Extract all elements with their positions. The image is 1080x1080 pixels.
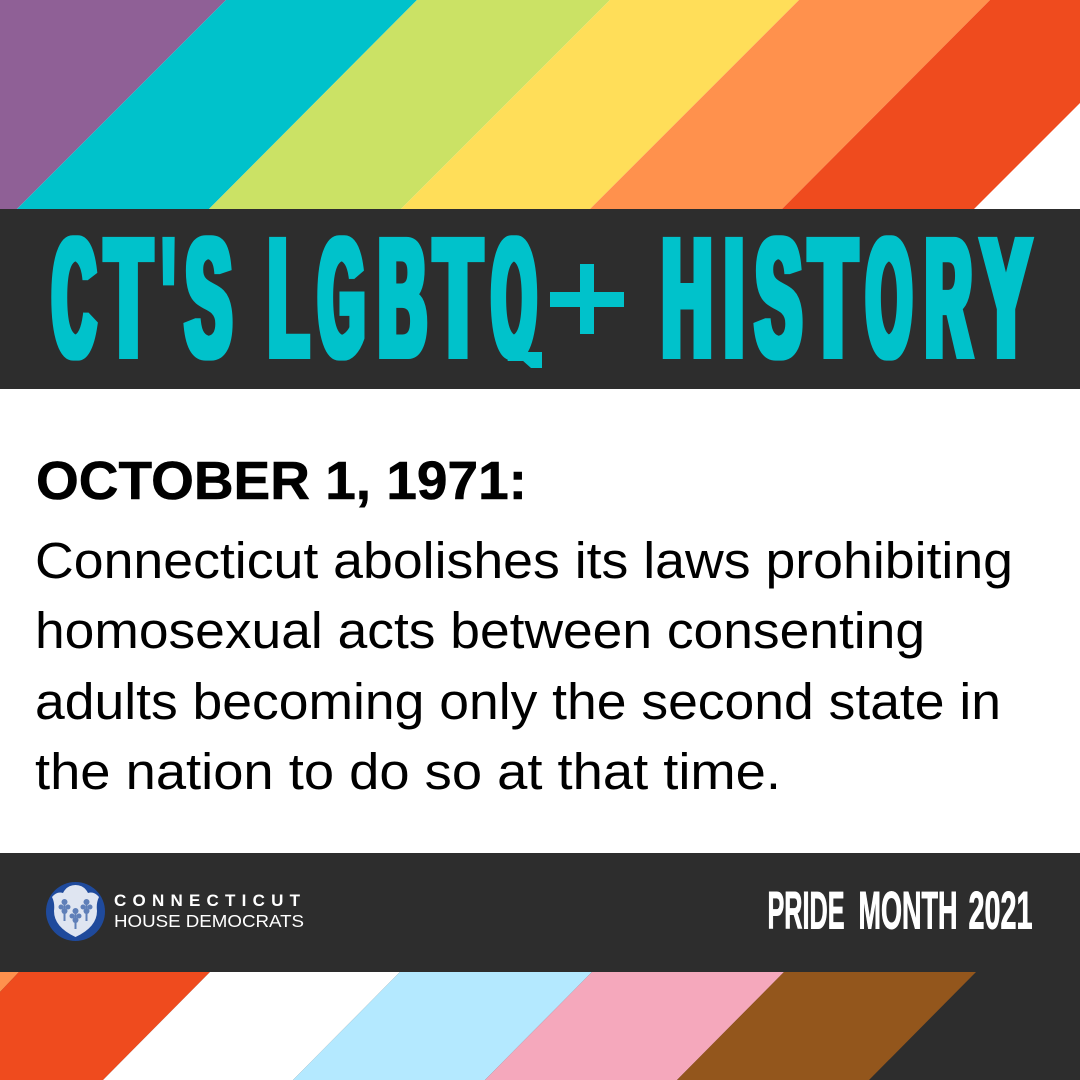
title: C xyxy=(52,204,96,392)
logo text: Connecticut: CONNECTICUT xyxy=(114,891,301,910)
footer banner xyxy=(0,853,1080,972)
title: B xyxy=(378,204,426,392)
title: Q tail xyxy=(515,352,542,368)
title xyxy=(51,235,1034,361)
title banner xyxy=(0,204,1080,392)
title: T xyxy=(434,204,482,392)
icon: Connecticut seal logo xyxy=(46,882,105,941)
title: T xyxy=(810,204,856,392)
title: S xyxy=(756,204,802,392)
bottom pride stripes xyxy=(0,972,1080,1080)
body text: the nation to do so at that time. xyxy=(35,743,781,800)
body text xyxy=(35,532,1013,800)
title: I xyxy=(724,204,744,392)
pride month label: MONTH xyxy=(858,882,958,940)
title: R xyxy=(926,204,972,392)
title: G xyxy=(318,204,364,392)
title: T xyxy=(106,204,152,392)
title: H xyxy=(662,204,712,392)
title: Q xyxy=(492,204,536,392)
pride month label: PRIDE xyxy=(768,882,844,940)
logo text: House Democrats: HOUSE DEMOCRATS xyxy=(114,911,304,931)
title: O xyxy=(866,204,912,392)
body text: homosexual acts between consenting xyxy=(35,602,925,659)
title: L xyxy=(268,204,308,392)
top rainbow stripes xyxy=(0,0,1080,209)
title: S xyxy=(186,204,232,392)
date heading: OCTOBER 1, 1971: xyxy=(36,451,527,511)
body text: Connecticut abolishes its laws prohibiting xyxy=(35,532,1013,589)
pride month label xyxy=(768,882,1032,940)
body text: adults becoming only the second state in xyxy=(35,673,1001,730)
title: ' xyxy=(164,204,174,392)
